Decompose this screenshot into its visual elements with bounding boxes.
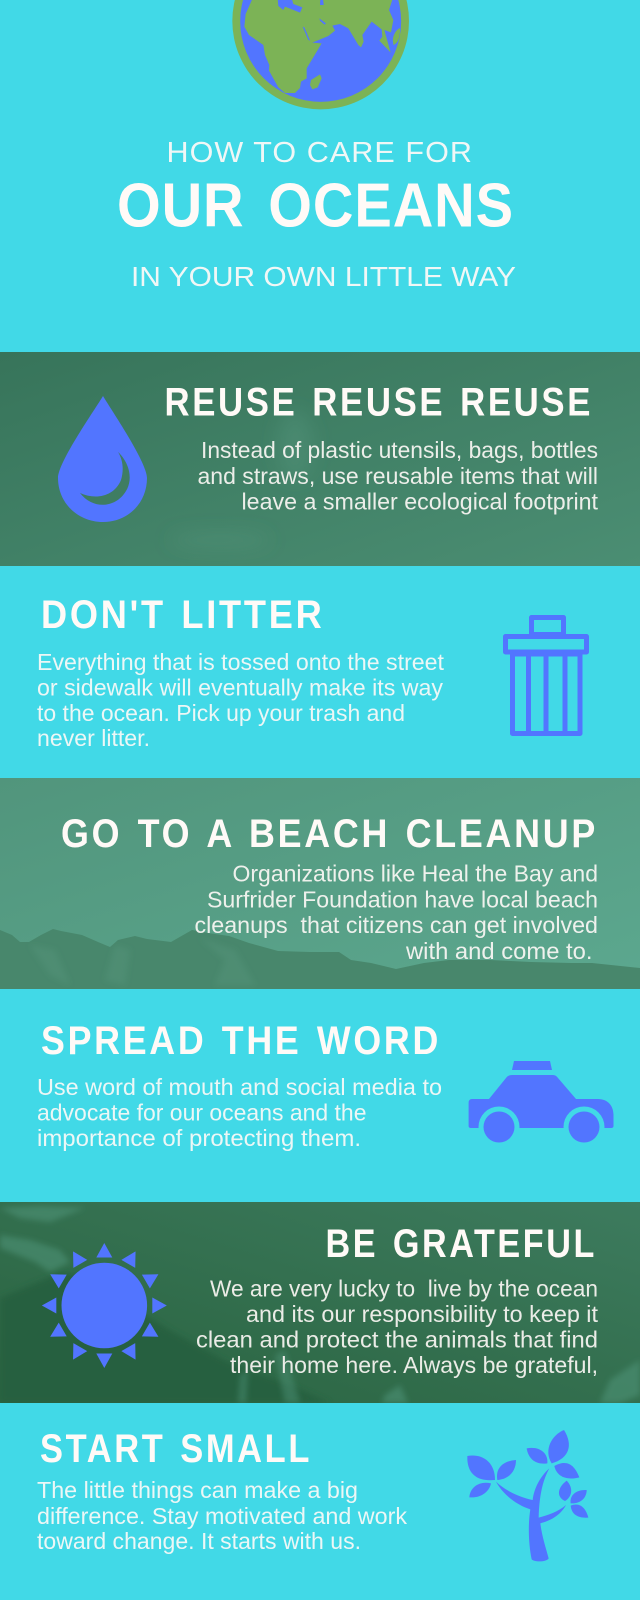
heading: SPREAD THE WORD — [41, 1019, 441, 1063]
panel: be grateful — [0, 1202, 640, 1403]
text block: cleanups that citizens can get involved — [194, 912, 598, 938]
panel: go to a beach cleanup — [0, 778, 640, 989]
panel: don't litter — [37, 593, 586, 751]
text block — [37, 1074, 442, 1151]
text block: Surfrider Foundation have local beach — [207, 886, 598, 912]
text block: Use word of mouth and social media to — [37, 1074, 442, 1100]
heading: REUSE REUSE REUSE — [164, 380, 593, 424]
icon: sun — [42, 1243, 167, 1368]
subtitle line: in your own little way: IN YOUR OWN LITTLE WAY — [131, 261, 516, 292]
panel: spread the word — [37, 1019, 614, 1151]
panel: reuse — [0, 352, 640, 566]
heading: GO TO A BEACH CLEANUP — [61, 812, 598, 856]
text block: never litter. — [37, 725, 150, 751]
text block: We are very lucky to live by the ocean — [210, 1276, 598, 1302]
text block — [37, 649, 445, 751]
text block: with and come to. — [405, 938, 592, 964]
landscape texture — [0, 1206, 640, 1403]
text block: advocate for our oceans and the — [37, 1100, 366, 1126]
text block: importance of protecting them. — [37, 1125, 361, 1151]
text block: and its our responsibility to keep it — [246, 1301, 599, 1327]
text block — [194, 860, 598, 964]
icon: water drop — [58, 396, 147, 522]
heading: START SMALL — [40, 1427, 312, 1471]
heading: BE GRATEFUL — [326, 1222, 597, 1266]
text block: toward change. It starts with us. — [37, 1528, 361, 1554]
heading: DON'T LITTER — [41, 593, 324, 637]
icon: tree — [467, 1430, 588, 1561]
icon: trash can — [506, 618, 586, 734]
icon: globe — [232, 0, 409, 109]
text block: leave a smaller ecological footprint — [242, 488, 599, 514]
text block: Organizations like Heal the Bay and — [232, 860, 598, 886]
icon: car — [469, 1061, 614, 1148]
text block: clean and protect the animals that find — [196, 1326, 598, 1352]
text block — [198, 437, 599, 514]
text block — [196, 1276, 599, 1378]
text block: or sidewalk will eventually make its way — [37, 674, 443, 700]
text block: and straws, use reusable items that will — [198, 463, 598, 489]
text block — [37, 1477, 408, 1554]
text block: difference. Stay motivated and work — [37, 1503, 408, 1529]
text block: Everything that is tossed onto the street — [37, 649, 445, 675]
text block: Instead of plastic utensils, bags, bottles — [201, 437, 598, 463]
panel: start small — [37, 1427, 588, 1561]
main title: our oceans: OUR OCEANS — [117, 172, 514, 240]
text block: to the ocean. Pick up your trash and — [37, 700, 405, 726]
mountains — [0, 929, 640, 989]
text block: their home here. Always be grateful, — [230, 1352, 598, 1378]
title — [117, 137, 516, 292]
text block: The little things can make a big — [37, 1477, 358, 1503]
subtitle line: how to care for: HOW TO CARE FOR — [166, 137, 473, 169]
